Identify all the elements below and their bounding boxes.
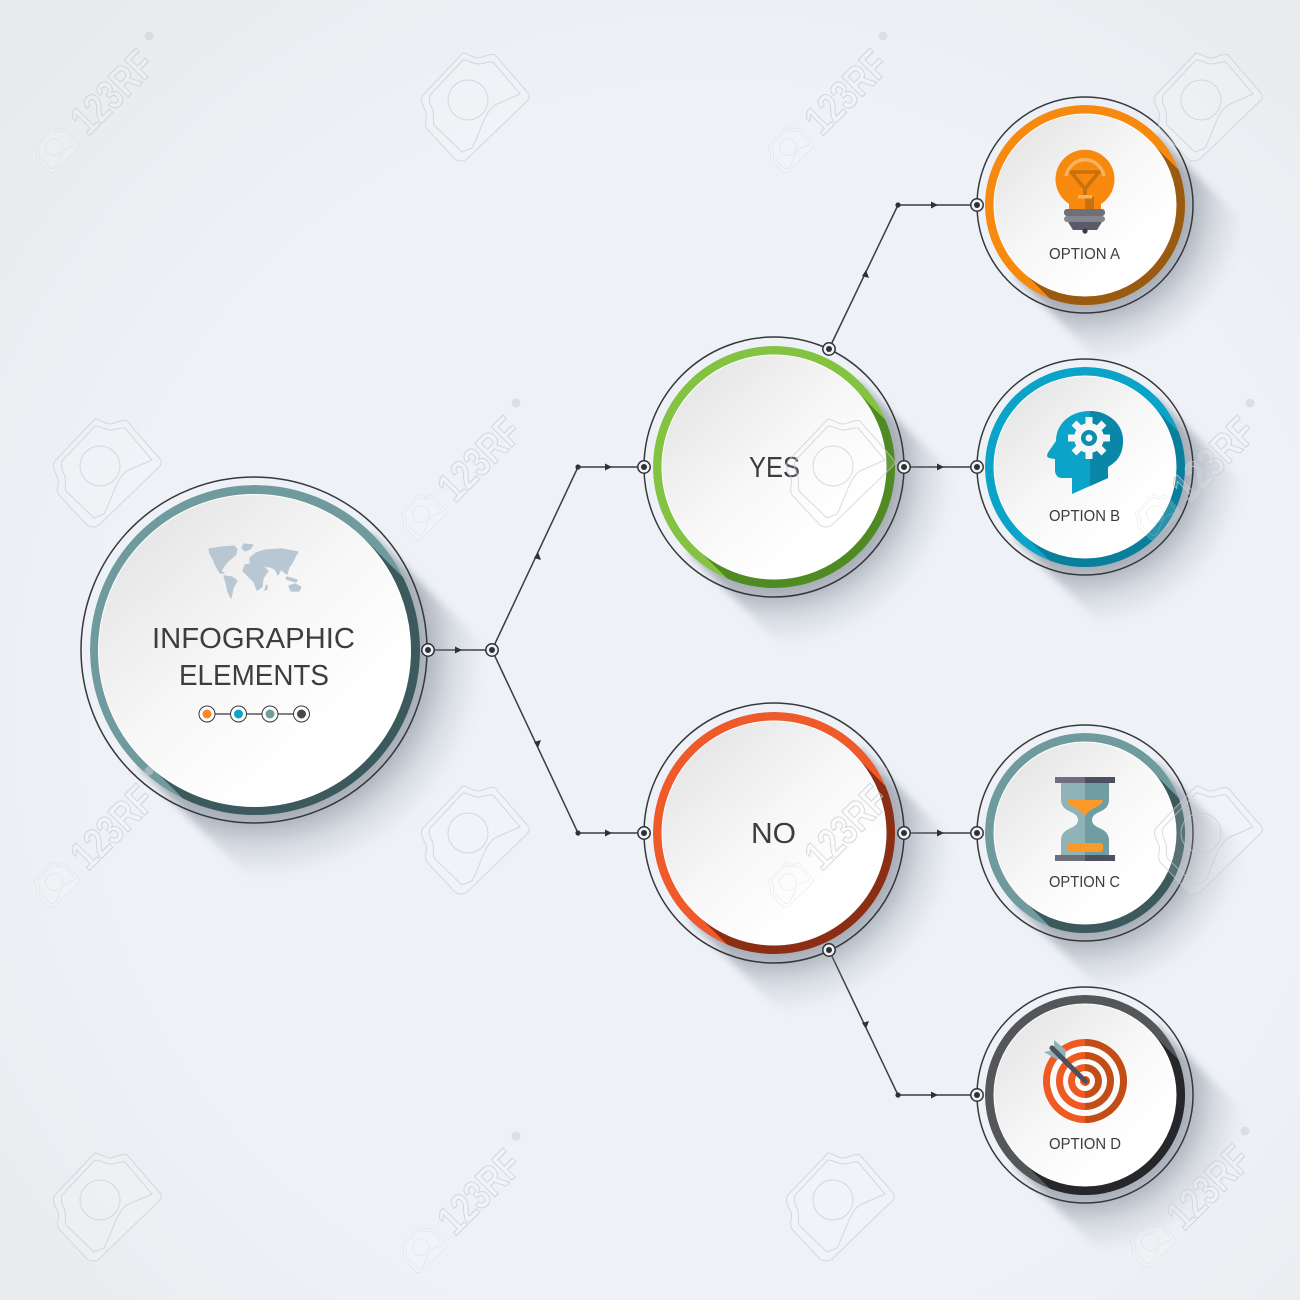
circle: no xyxy=(643,702,944,1002)
connector nodes xyxy=(422,199,983,1101)
title xyxy=(152,623,355,692)
icon: world map xyxy=(209,544,301,598)
label: option b: OPTION B xyxy=(1049,508,1120,525)
label: option a: OPTION A xyxy=(1049,246,1121,263)
circle: option b xyxy=(976,358,1232,614)
title: ELEMENTS xyxy=(179,660,329,692)
circle: option a xyxy=(976,96,1232,352)
watermark logos: 123RF xyxy=(1157,1136,1260,1238)
watermark logos: 123RF xyxy=(61,41,164,143)
watermark logos: 123RF xyxy=(1162,408,1265,510)
circle: yes xyxy=(643,336,944,636)
title: INFOGRAPHIC xyxy=(152,623,355,655)
watermark logos: 123RF xyxy=(795,41,898,143)
legend: four step dots xyxy=(199,706,310,722)
label: no: NO xyxy=(751,818,796,850)
circle: option d xyxy=(976,986,1232,1242)
circle: main infographic elements xyxy=(80,476,473,868)
watermark logos: 123RF xyxy=(428,408,531,510)
label: option c: OPTION C xyxy=(1049,874,1120,891)
icon: light bulb xyxy=(1056,150,1115,234)
connector arrowheads xyxy=(455,202,944,1098)
circle: option c xyxy=(976,724,1231,980)
watermark logos: 123RF xyxy=(795,776,898,878)
icon: head with gear xyxy=(1047,411,1123,494)
watermark logos: 123RF xyxy=(61,776,164,878)
icon: target with arrow xyxy=(1043,1039,1127,1123)
node centres and elbow dots xyxy=(425,202,980,1098)
icon: hourglass xyxy=(1055,777,1115,861)
watermark logos: 123RF xyxy=(428,1141,531,1243)
connector lines xyxy=(428,205,977,1095)
label: yes: YES xyxy=(749,452,800,484)
label: option d: OPTION D xyxy=(1049,1136,1121,1153)
